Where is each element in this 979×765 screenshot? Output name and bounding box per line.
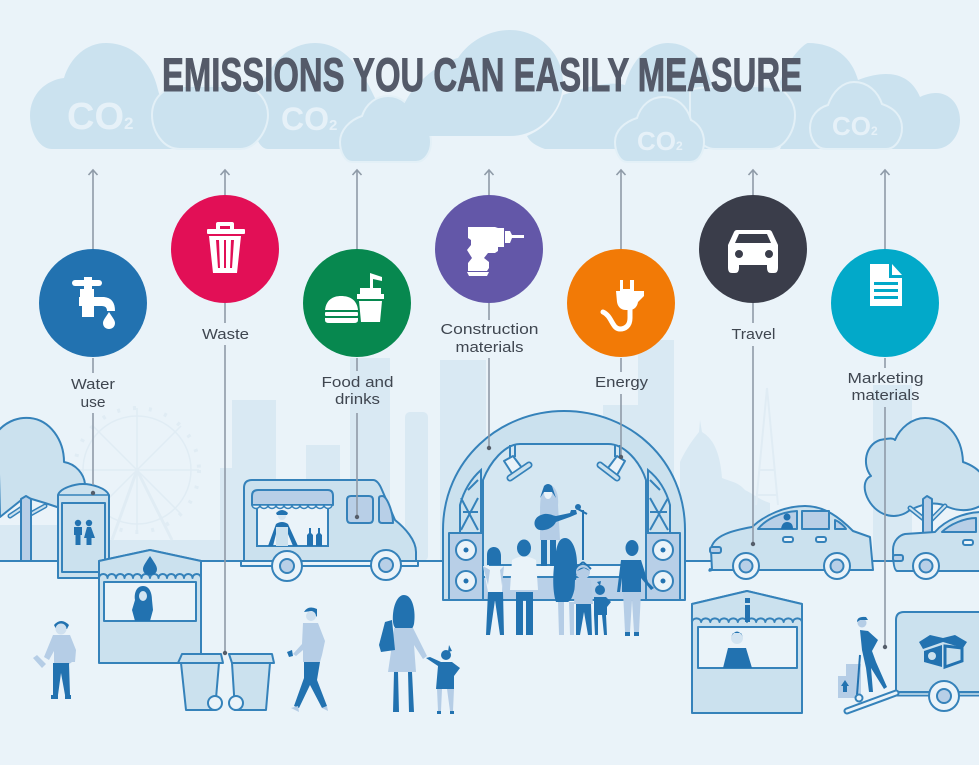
cloud 1 bbox=[30, 43, 175, 149]
audience bbox=[483, 538, 654, 636]
left spotlight bbox=[504, 445, 529, 478]
label: water use: use bbox=[80, 394, 106, 411]
category: waste bbox=[171, 195, 279, 343]
label: water use bbox=[71, 376, 115, 411]
stage platform bbox=[483, 577, 646, 600]
stage bbox=[443, 411, 685, 636]
info attendant bbox=[723, 632, 752, 668]
ferris wheel bbox=[75, 408, 199, 540]
category: energy bbox=[567, 249, 675, 391]
fan 2 bbox=[510, 540, 538, 635]
food vendor bbox=[268, 510, 298, 546]
construction line bbox=[484, 170, 494, 450]
cloud 3 bbox=[254, 43, 400, 149]
woman bbox=[379, 595, 427, 712]
label: food and drinks: drinks bbox=[335, 391, 380, 408]
child bbox=[426, 645, 460, 714]
waste line bbox=[220, 170, 230, 655]
label: water use: Water bbox=[71, 376, 115, 393]
ground line bbox=[0, 560, 979, 562]
fan 4 bbox=[574, 565, 593, 635]
label: travel: Travel bbox=[732, 326, 776, 343]
icon: info bbox=[745, 598, 750, 622]
cloud 7: CO2 bbox=[637, 126, 683, 156]
delivery truck bbox=[838, 612, 979, 711]
icon: document bbox=[870, 264, 902, 306]
left speaker bbox=[449, 533, 483, 600]
travel line bbox=[748, 170, 758, 546]
city skyline bbox=[0, 340, 912, 561]
cloud 2 bbox=[152, 86, 268, 149]
walking man bbox=[287, 608, 328, 712]
left tree bbox=[0, 418, 85, 561]
portable toilet bbox=[58, 484, 109, 578]
water stall bbox=[99, 550, 201, 663]
cloud 10: CO2 bbox=[832, 111, 878, 141]
label: energy: Energy bbox=[595, 374, 649, 391]
singer with guitar bbox=[534, 484, 577, 566]
fan 1 bbox=[483, 547, 504, 635]
fan 3 bbox=[553, 538, 577, 635]
cloud 6 bbox=[527, 43, 720, 149]
category: construction materials bbox=[435, 195, 543, 356]
label: marketing materials: materials bbox=[852, 387, 920, 404]
label: construction materials bbox=[440, 321, 538, 356]
icon: toilet people bbox=[74, 520, 95, 545]
marketing line bbox=[880, 170, 890, 649]
wheelie bins bbox=[178, 654, 274, 710]
label: construction materials: Construction bbox=[440, 321, 538, 338]
icon: burger and drink bbox=[325, 273, 384, 323]
category: food and drinks bbox=[303, 249, 411, 408]
microphone stand bbox=[575, 504, 591, 569]
cloud 5 bbox=[402, 30, 563, 136]
label: food and drinks bbox=[322, 374, 394, 408]
right tree bbox=[865, 418, 979, 533]
woman and child bbox=[379, 595, 460, 714]
connector lines and arrows bbox=[88, 170, 890, 655]
car bbox=[709, 506, 873, 579]
fan 6 bbox=[617, 540, 654, 636]
fan 5 bbox=[594, 581, 611, 635]
cloud 4 bbox=[340, 96, 431, 162]
icon: water drop bbox=[143, 556, 157, 575]
category: marketing materials bbox=[831, 249, 939, 404]
cloud 3: CO2 bbox=[281, 101, 337, 137]
label: food and drinks: Food and bbox=[322, 374, 394, 391]
label: marketing materials bbox=[848, 370, 924, 404]
icon: plug bbox=[603, 280, 644, 329]
bottles bbox=[307, 528, 322, 546]
icon: drill bbox=[467, 227, 524, 276]
icon: bin bbox=[207, 222, 245, 273]
cloud 9 bbox=[780, 43, 960, 149]
water use line bbox=[88, 170, 98, 495]
icon: recycling box bbox=[919, 635, 967, 667]
cloud 1: CO2 bbox=[67, 96, 133, 138]
cloud 8 bbox=[690, 86, 795, 149]
stall attendant bbox=[132, 586, 153, 621]
icon: tap bbox=[72, 277, 115, 329]
icon: car bbox=[728, 230, 778, 273]
category: travel bbox=[699, 195, 807, 343]
clouds band bbox=[30, 30, 960, 162]
right truss bbox=[648, 470, 670, 533]
category: water use bbox=[39, 249, 147, 411]
information stall bbox=[692, 591, 802, 713]
right speaker bbox=[646, 533, 680, 600]
food truck bbox=[241, 480, 418, 581]
delivery person bbox=[856, 617, 887, 702]
ramp bbox=[847, 693, 896, 711]
stacked boxes bbox=[838, 664, 861, 698]
child with bottle bbox=[33, 621, 76, 699]
cloud 7 bbox=[615, 97, 704, 162]
left truss bbox=[460, 470, 481, 533]
cloud 10 bbox=[810, 82, 902, 149]
food line bbox=[352, 170, 362, 519]
right spotlight bbox=[600, 445, 625, 478]
label: construction materials: materials bbox=[456, 339, 524, 356]
label: waste: Waste bbox=[202, 326, 249, 343]
energy line bbox=[616, 170, 626, 459]
second car bbox=[893, 512, 979, 579]
label: marketing materials: Marketing bbox=[848, 370, 924, 387]
